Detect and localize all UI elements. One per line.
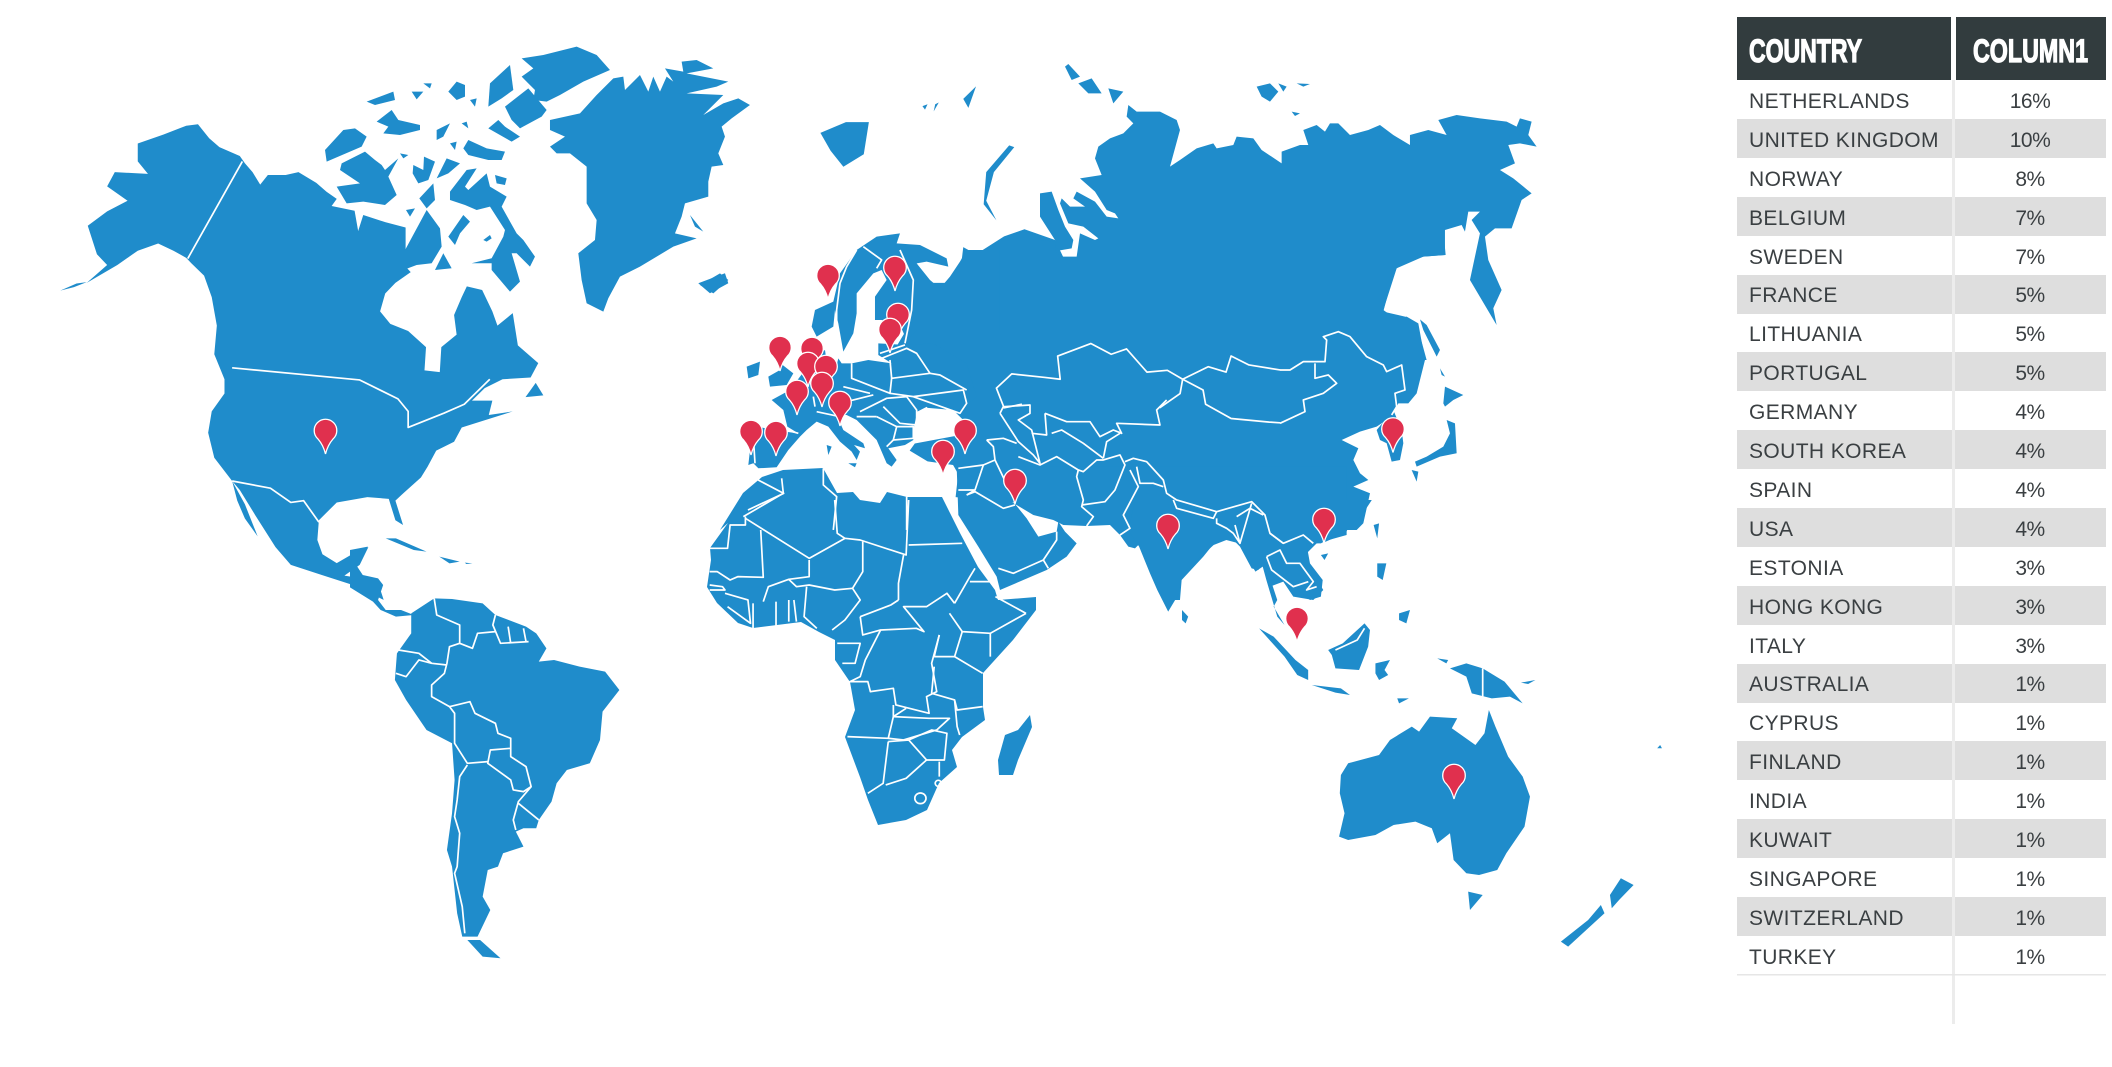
percentage values: 1%	[2015, 946, 2045, 969]
country names: SWITZERLAND	[1749, 907, 1904, 930]
country names: INDIA	[1749, 790, 1807, 813]
world map	[60, 47, 1662, 958]
middle east and south asia	[957, 467, 1347, 600]
borders: borneo and new guinea	[1335, 628, 1483, 698]
percentage values: 4%	[2015, 401, 2045, 424]
table header: country: COUNTRY	[1749, 33, 1862, 69]
percentage values: 4%	[2015, 479, 2045, 502]
pin: portugal	[740, 420, 762, 455]
south-east asia, indonesia and oceania	[1128, 500, 1662, 947]
country names: KUWAIT	[1749, 829, 1832, 852]
country names: ITALY	[1749, 635, 1806, 658]
percentage values: 7%	[2015, 246, 2045, 269]
country names: FRANCE	[1749, 284, 1838, 307]
percentage values: 3%	[2015, 557, 2045, 580]
country names: HONG KONG	[1749, 596, 1883, 619]
percentage values: 7%	[2015, 207, 2045, 230]
percentage values: 8%	[2015, 168, 2045, 191]
percentage values: 1%	[2015, 868, 2045, 891]
percentage values: 3%	[2015, 635, 2045, 658]
country names: NETHERLANDS	[1749, 90, 1910, 113]
country names	[1749, 90, 1939, 969]
country names: PORTUGAL	[1749, 362, 1867, 385]
percentage values: 4%	[2015, 518, 2045, 541]
western russia, central asia and china	[820, 86, 1361, 542]
percentage values: 1%	[2015, 673, 2045, 696]
table row stripes	[1737, 119, 2106, 936]
pin: italy	[829, 391, 851, 426]
country names: TURKEY	[1749, 946, 1837, 969]
percentage values: 16%	[2010, 90, 2050, 113]
pin: estonia	[887, 303, 909, 338]
pin: lithuania	[879, 318, 901, 353]
borders: europe and north africa	[743, 247, 967, 530]
percentage values: 1%	[2015, 829, 2045, 852]
pin: singapore	[1286, 607, 1308, 642]
africa	[707, 468, 1036, 825]
pin: turkey	[954, 419, 976, 454]
country names: BELGIUM	[1749, 207, 1846, 230]
country names: FINLAND	[1749, 751, 1842, 774]
country names: SOUTH KOREA	[1749, 440, 1906, 463]
country names: USA	[1749, 518, 1793, 541]
location pins	[314, 256, 1465, 799]
percentage values: 1%	[2015, 907, 2045, 930]
table header: column1	[1956, 17, 2106, 80]
percentage values: 5%	[2015, 362, 2045, 385]
country names: ESTONIA	[1749, 557, 1844, 580]
country names: SWEDEN	[1749, 246, 1844, 269]
pin: finland	[884, 256, 906, 291]
table header: country	[1737, 17, 1951, 80]
pin: south korea	[1382, 418, 1404, 452]
country names: UNITED KINGDOM	[1749, 129, 1939, 152]
north america mainland	[60, 124, 543, 600]
pin: france	[786, 380, 808, 415]
country names: NORWAY	[1749, 168, 1843, 191]
percentage values: 1%	[2015, 790, 2045, 813]
country names: CYPRUS	[1749, 712, 1839, 735]
pin: united kingdom	[769, 336, 791, 371]
borders: russia, kazakhstan and mongolia	[996, 344, 1280, 423]
table: country percentages	[1737, 17, 2106, 1024]
country names: AUSTRALIA	[1749, 673, 1869, 696]
north america borders	[188, 161, 490, 522]
percentage values: 1%	[2015, 712, 2045, 735]
pin: australia	[1443, 764, 1465, 799]
pin: india	[1157, 514, 1179, 549]
percentage values: 3%	[2015, 596, 2045, 619]
pin: belgium	[797, 352, 819, 387]
europe	[700, 233, 1000, 468]
pin: spain	[765, 421, 787, 456]
central and south america	[350, 538, 619, 958]
country names: SINGAPORE	[1749, 868, 1877, 891]
canadian arctic, greenland and iceland	[325, 47, 750, 312]
percentage values: 5%	[2015, 323, 2045, 346]
percentage values: 1%	[2015, 751, 2045, 774]
siberia and far east coast	[1040, 64, 1537, 360]
country names: GERMANY	[1749, 401, 1858, 424]
pin: germany	[815, 355, 837, 390]
pin: switzerland	[811, 372, 833, 407]
borders: middle east and south asia	[958, 400, 1317, 590]
pin: netherlands	[801, 337, 823, 372]
percentage values: 10%	[2010, 129, 2050, 152]
pin: kuwait	[1004, 469, 1026, 504]
borders: north-east china and korea	[1280, 332, 1405, 423]
pin: cyprus	[932, 440, 954, 475]
percentage values: 4%	[2015, 440, 2045, 463]
pin: hong kong	[1313, 508, 1335, 543]
east china, korea and japan	[1280, 230, 1463, 530]
pin: norway	[817, 264, 839, 299]
country names: SPAIN	[1749, 479, 1812, 502]
country names: LITHUANIA	[1749, 323, 1862, 346]
pin: usa	[314, 419, 337, 454]
percentage values	[2010, 90, 2050, 969]
percentage values: 5%	[2015, 284, 2045, 307]
